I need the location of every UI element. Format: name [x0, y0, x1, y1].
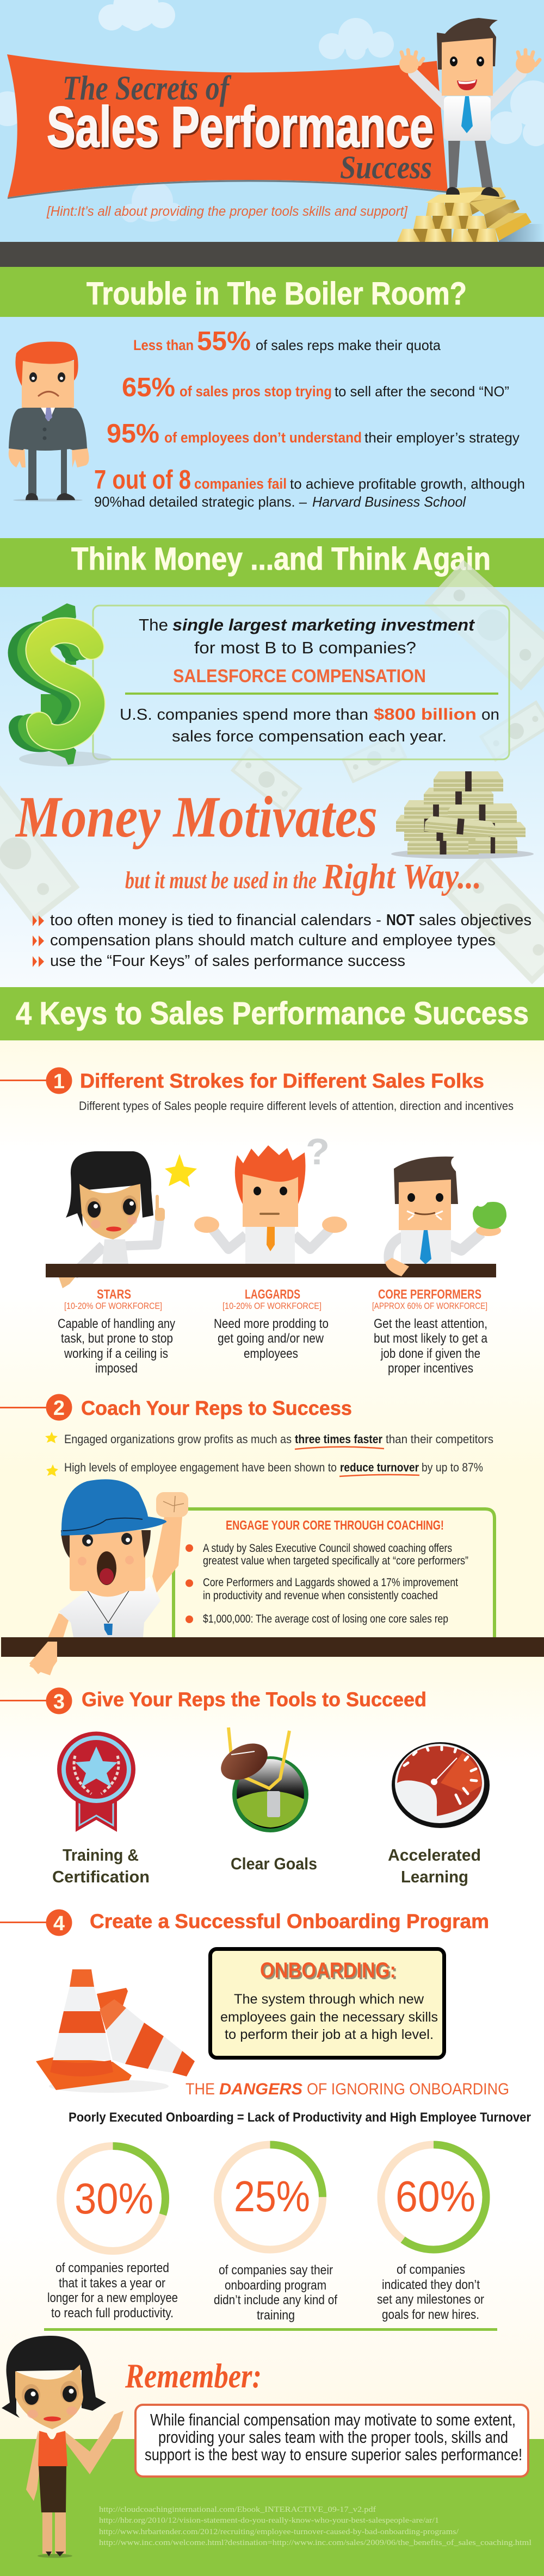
column: core performers: CORE PERFORMERS: [378, 1287, 481, 1302]
icon: pile of money: [391, 771, 534, 859]
skirt: [39, 2466, 66, 2512]
sources: http://cloudcoachinginternational.com/Ebook_INTERACTIVE_09-17_v2.pdf: [99, 2505, 376, 2514]
callout: salesforce compensation: for most B to B companies?: [194, 638, 416, 657]
tie: [461, 96, 473, 133]
key 3 heading: 3: [53, 1691, 65, 1713]
dark gaps: [413, 203, 479, 242]
callout: onboarding definition: ONBOARDING:: [260, 1958, 396, 1982]
label: accelerated learning: [388, 1845, 481, 1886]
ring chart: 60%: 60%: [395, 2172, 475, 2221]
callout: closing statement: [135, 2405, 528, 2477]
bullet list: money points: compensation plans should match culture and employee types: [50, 932, 496, 949]
sources: [99, 2505, 531, 2547]
fist: [156, 1492, 188, 1517]
panel: engage your core: ENGAGE YOUR CORE THROUGH COACHING!: [226, 1518, 444, 1533]
icon: football goal: [215, 1727, 308, 1832]
left arm: [26, 2431, 42, 2501]
core performer hand: [385, 1258, 409, 1276]
bullet text: A study by Sales Executive Council showed coaching offers: [203, 1542, 452, 1555]
character: happy businessman: [399, 18, 540, 197]
panel: money background: [0, 587, 544, 987]
coaching fact 2: High levels of employee engagement have been shown to: [64, 1461, 337, 1474]
stat: 65%: 65%: [122, 373, 175, 402]
column: stars: task, but prone to stop: [61, 1331, 173, 1346]
head: [70, 1530, 145, 1591]
callout: salesforce compensation: single largest marketing investment: [172, 615, 475, 634]
caption: 60%: set any milestones or: [377, 2292, 484, 2307]
eyes: [407, 1193, 443, 1202]
stat: 95%: [107, 419, 520, 448]
caption: 25%: didn’t include any kind of: [214, 2293, 337, 2307]
counter 2: [1, 1637, 544, 1657]
chewing mouth: [407, 1211, 443, 1220]
arms: [413, 73, 521, 107]
character: woman presenter: [2, 2336, 123, 2558]
heading: dangers: THE: [186, 2080, 215, 2098]
torso: [102, 1239, 128, 1264]
eyes: [254, 1187, 287, 1195]
stat: 55%: 55%: [197, 327, 251, 356]
sources: http://hbr.org/2010/12/vision-statement-do-you-really-know-who-your-best-salespeople-are/ar/1: [99, 2516, 439, 2525]
label: training: Training &: [63, 1845, 139, 1864]
eyes: [82, 1533, 132, 1546]
stat: 95%: of employees don’t understand: [164, 429, 362, 446]
vertical bar: [41, 603, 76, 765]
key 1 heading: Different Strokes for Different Sales Folks: [80, 1070, 484, 1092]
icon: training badge: [57, 1732, 135, 1832]
label: training: [52, 1845, 150, 1886]
caption: 60%: goals for new hires.: [382, 2307, 479, 2322]
key 2 heading: Coach Your Reps to Success: [81, 1397, 352, 1419]
callout: onboarding definition: The system through which new: [234, 1992, 424, 2007]
arm down: [73, 1246, 103, 1275]
key 1 heading: [0, 1068, 484, 1094]
head: [442, 38, 493, 96]
hint line: [Hint:It’s all about providing the proper tools skills and support]: [46, 204, 408, 219]
banner: [7, 54, 448, 199]
key 4 heading: 4: [53, 1912, 65, 1935]
right arm: [64, 2411, 123, 2474]
column: stars: imposed: [95, 1361, 138, 1376]
ring chart: 25%: [218, 2145, 323, 2249]
stat: 65%: [122, 373, 509, 402]
section heading band: 4 keys: [0, 987, 544, 1040]
caption: 60%: [377, 2262, 484, 2322]
key 3 heading: Give Your Reps the Tools to Succeed: [82, 1688, 426, 1711]
caption: 30%: that it takes a year or: [59, 2276, 165, 2291]
subheading: right way: but it must be used in the: [125, 867, 317, 894]
lips: [106, 1226, 121, 1232]
shoes: [446, 187, 499, 197]
bullet text: in productivity and revenue when consistently coached: [203, 1589, 438, 1602]
heading: money motivates: Money Motivates: [15, 785, 378, 850]
ring chart: 30%: [60, 2146, 165, 2251]
legs: [448, 139, 493, 188]
column: laggards: LAGGARDS: [245, 1287, 300, 1302]
question mark: ?: [306, 1131, 330, 1172]
front face: [39, 631, 92, 738]
callout: onboarding definition: ONBOARDING:: [262, 1960, 398, 1984]
key 1 intro text: Different types of Sales people require different levels of attention, direction and incentives: [79, 1099, 514, 1113]
footer green background: [0, 2439, 544, 2576]
face: [79, 1184, 140, 1239]
upright base: [36, 2057, 132, 2090]
panel: keys background: [0, 1040, 544, 2439]
mouth: [457, 79, 477, 90]
column: stars: working if a ceiling is: [64, 1346, 168, 1361]
bullet list: money points: NOT: [386, 912, 415, 929]
shoes: [46, 2552, 64, 2556]
stat: 65%: of sales pros stop trying: [180, 383, 332, 400]
arms: [211, 1227, 332, 1249]
bullet text: Core Performers and Laggards showed a 17% improvement: [203, 1576, 458, 1589]
fallen cone body: [100, 1999, 195, 2076]
ring chart: 30%: 30%: [75, 2174, 153, 2223]
pointing hand: [155, 1195, 165, 1221]
stat: 7 out of 8: [94, 465, 525, 510]
caption: 25%: of companies say their: [219, 2263, 333, 2278]
hands: [194, 1217, 347, 1233]
ring chart: 60%: [381, 2145, 486, 2249]
top faces and sides: [469, 191, 506, 215]
caption: 30%: [47, 2261, 178, 2321]
column: stars: [10-20% OF WORKFORCE]: [64, 1301, 162, 1311]
title: The Secrets of: [63, 68, 232, 107]
bullet text: $1,000,000: The average cost of losing one core sales rep: [203, 1613, 448, 1625]
clouds: [0, 0, 544, 222]
background banknotes: [0, 560, 544, 984]
gold bars: [397, 187, 544, 242]
stat: 55%: [133, 327, 441, 356]
callout: salesforce compensation: [120, 615, 499, 745]
callout: salesforce compensation: SALESFORCE COMPENSATION: [173, 666, 426, 687]
hair: [235, 1145, 306, 1204]
key 2 heading: 2: [53, 1397, 65, 1420]
callout: salesforce compensation: The: [139, 615, 168, 634]
face: [15, 2365, 83, 2429]
face: [399, 1177, 451, 1230]
column: laggards: get going and/or new: [218, 1331, 324, 1346]
key 3 heading: [0, 1687, 426, 1714]
subheading: right way: Right Way...: [322, 857, 481, 896]
icon: speedometer: [392, 1742, 490, 1828]
key 4 heading: [0, 1909, 489, 1936]
sources: http://www.inc.com/welcome.html?destination=http://www.inc.com/sales/2009/06/the_benefits_of_sales_coaching.html: [99, 2538, 531, 2547]
coaching fact 2: [46, 1461, 483, 1476]
stat: 7 out of 8: Harvard Business School: [312, 494, 466, 510]
dark band: [0, 242, 544, 267]
coaching fact 1: than their competitors: [386, 1432, 493, 1446]
eyes: [85, 1195, 138, 1218]
section heading band: think money: Think Money ...and Think Again: [71, 541, 491, 577]
counter 1: [46, 1264, 496, 1277]
bullet list: money points: use the “Four Keys” of sales performance success: [50, 952, 405, 970]
stat: 95%: 95%: [107, 419, 159, 448]
column: laggards: [214, 1287, 329, 1361]
column: core performers: but most likely to get a: [374, 1331, 488, 1346]
callout: salesforce compensation: U.S. companies spend more than: [120, 706, 368, 723]
caption: 30%: to reach full productivity.: [51, 2306, 174, 2321]
column: core performers: proper incentives: [388, 1361, 473, 1376]
cap: [61, 1479, 166, 1536]
stat: 7 out of 8: 7 out of 8: [94, 465, 191, 495]
character: coach: [29, 1479, 188, 1675]
bullet text: greatest value when targeted specifically at “core performers”: [203, 1555, 468, 1567]
panel box fill for callout: [93, 606, 509, 759]
ring chart: 25%: 25%: [234, 2172, 310, 2221]
column: laggards: employees: [244, 1346, 298, 1361]
bullet text: [203, 1542, 468, 1625]
face: [243, 1169, 298, 1227]
label: training: Certification: [52, 1867, 150, 1886]
orange top: [38, 2431, 67, 2466]
character: core performer: [388, 1157, 506, 1264]
title: [47, 68, 435, 185]
header sky background: [0, 0, 544, 242]
hands: [399, 55, 535, 73]
hair: [66, 1151, 153, 1227]
sources: http://www.hrbartender.com/2012/recruiting/employee-turnover-caused-by-bad-onboarding-programs/: [99, 2528, 459, 2536]
hair: [61, 1530, 151, 1558]
eyes: [450, 57, 484, 66]
fallen cone base: [97, 1988, 128, 2022]
gold faces: [397, 203, 498, 242]
hair: [394, 1157, 458, 1204]
hair: [437, 18, 498, 70]
shirt: [444, 96, 491, 141]
section heading band: trouble: [0, 267, 544, 317]
coaching fact 2: reduce turnover: [340, 1461, 419, 1474]
character: laggard: [194, 1131, 347, 1264]
stat: 7 out of 8: to achieve profitable growth, although: [290, 476, 525, 492]
column: laggards: Need more prodding to: [214, 1317, 329, 1331]
label: accelerated learning: Learning: [401, 1867, 468, 1886]
bullet list: money points: too often money is tied to financial calendars -: [50, 912, 381, 929]
key 4 heading: Create a Successful Onboarding Program: [90, 1910, 489, 1932]
bar shadow: [499, 224, 544, 242]
callout: onboarding definition: to perform their job at a high level.: [225, 2027, 434, 2042]
character: star employee: [59, 1151, 197, 1288]
icon: green dollar sign: [19, 603, 112, 766]
whistle: [87, 1590, 129, 1635]
subheading: right way: [125, 857, 481, 896]
callout: onboarding definition: employees gain the necessary skills: [220, 2010, 438, 2025]
left arm: [388, 1237, 403, 1264]
stat: 7 out of 8: 90%had detailed strategic plans. –: [94, 494, 307, 510]
caption: 60%: indicated they don’t: [382, 2278, 480, 2292]
panel: engage your core: [174, 1509, 494, 1637]
callout: salesforce compensation: on: [481, 706, 499, 723]
upright cone: [50, 1969, 113, 2076]
column: stars: [58, 1287, 175, 1376]
callout: salesforce compensation: sales force compensation each year.: [172, 728, 447, 745]
column: stars: STARS: [97, 1287, 131, 1302]
arm up: [124, 1217, 160, 1246]
column: core performers: [APPROX 60% OF WORKFORCE]: [372, 1301, 487, 1311]
neck: [87, 1590, 129, 1597]
coaching fact 1: three times faster: [295, 1432, 382, 1446]
caption: 25%: [214, 2263, 337, 2323]
soft shadow: [49, 2080, 169, 2093]
heading: remember: Remember:: [125, 2356, 262, 2395]
tie: [420, 1230, 431, 1264]
bullet markers: [186, 1544, 193, 1623]
torso: [401, 1230, 451, 1264]
column: core performers: Get the least attention,: [374, 1317, 487, 1331]
legs: [42, 2512, 66, 2554]
section heading band: think money: [0, 538, 544, 587]
star: [165, 1154, 197, 1187]
key 2 heading: [0, 1394, 352, 1421]
column: core performers: [372, 1287, 488, 1376]
coaching fact 1: [45, 1432, 493, 1449]
lips: [44, 2417, 61, 2421]
bullet list: money points: sales objectives: [419, 912, 531, 929]
shouting mouth: [97, 1551, 116, 1585]
torso: [245, 1226, 295, 1264]
stat: 55%: Less than: [133, 337, 194, 353]
section heading band: trouble: Trouble in The Boiler Room?: [86, 276, 467, 311]
stat: 7 out of 8: companies fail: [194, 476, 287, 492]
title: Success: [340, 149, 432, 185]
callout: salesforce compensation: $800 billion: [374, 706, 477, 723]
shirt: [59, 1576, 160, 1637]
stat: 65%: to sell after the second “NO”: [335, 383, 509, 400]
raised arm: [152, 1517, 182, 1593]
stat: 55%: of sales reps make their quota: [256, 337, 441, 353]
caption: 25%: onboarding program: [225, 2278, 326, 2293]
callout: onboarding definition: [210, 1949, 444, 2058]
extruded body: [20, 631, 92, 740]
left arm: [29, 1613, 70, 1675]
hair: [2, 2336, 106, 2418]
column: laggards: [10-20% OF WORKFORCE]: [222, 1301, 322, 1311]
coach hand: [29, 1642, 57, 1674]
coaching fact 2: by up to 87%: [422, 1461, 483, 1474]
mouth: [259, 1213, 280, 1215]
divider: [44, 2328, 497, 2331]
caption: 30%: longer for a new employee: [47, 2291, 178, 2305]
label: accelerated learning: Accelerated: [388, 1845, 481, 1864]
column: stars: Capable of handling any: [58, 1317, 175, 1331]
column: core performers: job done if given the: [380, 1346, 480, 1361]
caption: 60%: of companies: [397, 2262, 465, 2277]
key 1 heading: 1: [53, 1070, 65, 1093]
caption: 25%: training: [257, 2308, 295, 2323]
eyes: [22, 2381, 79, 2406]
heading: dangers: DANGERS: [219, 2080, 302, 2098]
character: sad salesman: [9, 341, 89, 501]
heading: dangers: [186, 2080, 509, 2098]
coaching fact 1: Engaged organizations grow profits as much as: [64, 1432, 292, 1446]
heading: dangers: OF IGNORING ONBOARDING: [307, 2080, 509, 2098]
panel: trouble stats: [0, 317, 544, 538]
right arm and apple: [449, 1233, 481, 1250]
caption: 30%: of companies reported: [55, 2261, 169, 2275]
tie: [267, 1226, 275, 1251]
bullet list: money points: [33, 912, 531, 970]
stat: 95%: their employer’s strategy: [364, 429, 520, 446]
icon: traffic cones: [36, 1969, 195, 2093]
label: clear goals: Clear Goals: [231, 1854, 317, 1873]
